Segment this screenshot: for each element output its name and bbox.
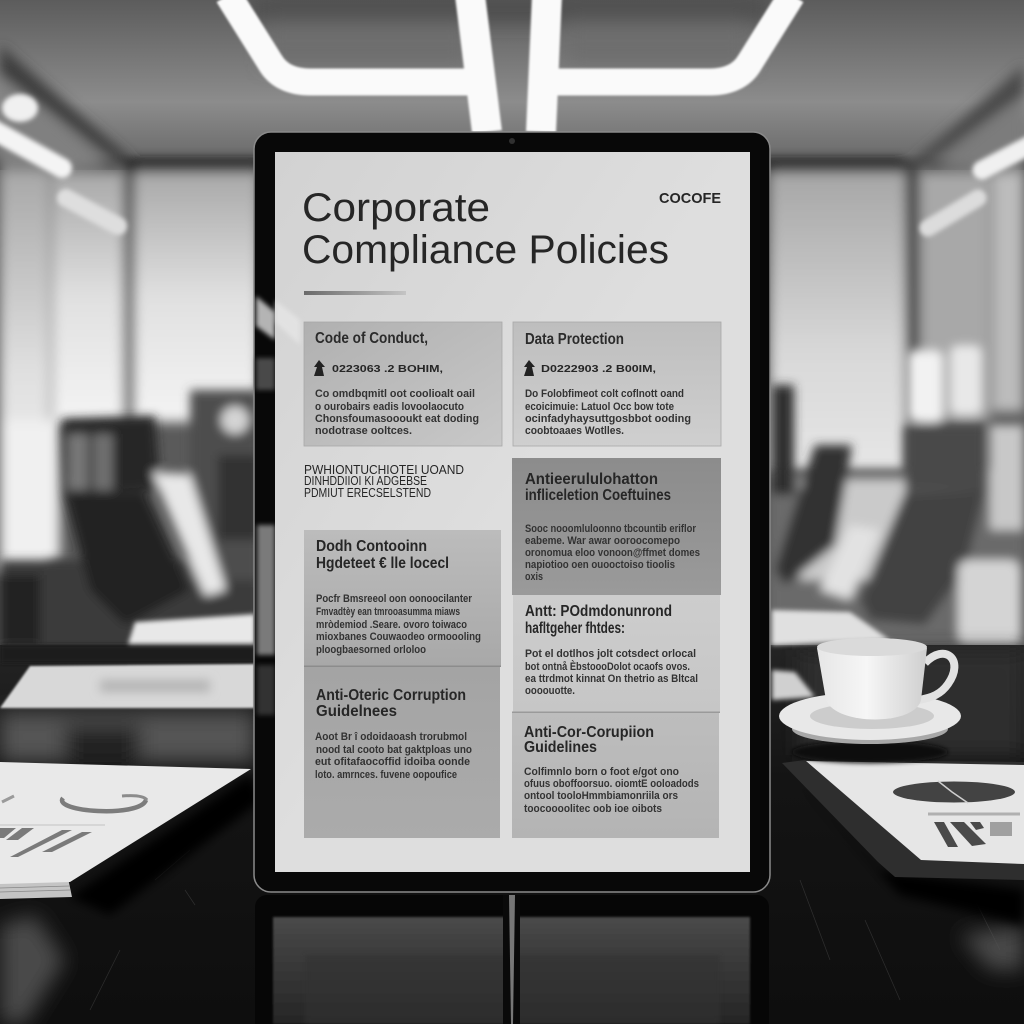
chairs right [770,345,1024,650]
bezel reflections [256,296,275,715]
panel: anti-corruption guidelines: ofuus oboffoorsuo. oiomtE ooloadods [524,778,699,790]
panel: anti-corruption guidelines: Guidelines [524,739,597,756]
panel: anti-podomonurond: bot ontnå ÈbstoooDolot ocaofs ovos. [525,660,690,673]
panel: anti-fraud dark: oxis [525,571,543,583]
panel: anti-oteric corruption guidelines: Anti-Oteric Corruption [316,687,466,704]
panel: anti-corruption guidelines: toocoooolitec oob ioe oibots [524,803,662,815]
title: Compliance Policies [302,228,669,272]
panel: data protection: Data Protection [525,331,624,348]
panel: left middle policy: mròdemiod .Seare. ovoro toiwaco [316,619,467,631]
brand label: COCOFE [659,190,721,207]
panel: code of conduct: 0223063 .2 BOHIM, [332,363,443,375]
table top [0,610,1024,1024]
panel: anti-oteric corruption guidelines: loto. amrnces. fuvene oopoufice [315,769,457,781]
panel: anti-fraud dark: infliceletion Coeftuines [525,487,671,504]
chairs left [0,390,260,650]
panel: anti-corruption guidelines: Colfimnlo born o foot e/got ono [524,766,680,778]
panel: anti-fraud dark: eabeme. War awar ooroocomepo [525,535,680,547]
panel: data protection [513,322,721,446]
title rule [304,291,406,295]
panel: data protection: ocinfadyhaysuttgosbbot ooding [525,413,691,425]
panel: anti-oteric corruption guidelines: Aoot Br î odoidaoash trorubmol [315,731,467,743]
panel: anti-fraud dark: Sooc nooomluloonno tbcountib eriflor [525,523,696,535]
panel: anti-fraud dark: oronomua eloo vonoon@ffmet domes [525,547,700,559]
panel: anti-podomonurond: ea ttrdmot kinnat On thetrio as Bltcal [525,673,698,685]
panel: left middle policy: mioxbanes Couwaodeo ormoooling [316,631,481,643]
panel: anti-oteric corruption guidelines: Guidelnees [316,703,397,720]
coffee cup and saucer [779,638,961,763]
panel: left middle policy: Fmvadtèy ean tmrooasumma miaws [316,606,460,618]
panel: anti-fraud dark [512,458,721,595]
panel: left middle policy: Pocfr Bmsreeol oon oonoocilanter [316,593,472,605]
panel: anti-corruption guidelines: ontool tooloHmmbiamonriila ors [524,790,678,802]
panel: anti-oteric corruption guidelines [304,666,501,838]
panel: data protection: D0222903 .2 B00IM, [541,363,656,375]
panel: data protection: ecoicimuie: Latuol Occ bow tote [525,401,674,413]
standalone text block: PDMIUT ERECSELSTEND [304,485,431,500]
document: right tablet with pie chart [782,760,1024,925]
panel: anti-corruption guidelines: Anti-Cor-Corupiion [524,724,654,741]
panel: code of conduct: o ourobairs eadis lovoolaocuto [315,401,464,413]
panel: anti-fraud dark: Antieerululohatton [525,471,658,488]
document: left papers [0,762,262,915]
standalone text block: DINHDDIIOI KI ADGEBSE [304,473,427,488]
panel: anti-podomonurond: Pot el dotlhos jolt cotsdect orlocal [525,648,696,660]
tablet screen [275,152,750,872]
panel: code of conduct: nodotrase ooltces. [315,425,412,437]
panel: anti-corruption guidelines [512,712,720,838]
title [302,186,669,272]
panel: left middle policy: Hgdeteet € lle locecl [316,555,449,572]
panel: data protection: coobtoaaes Wotlles. [525,425,624,437]
panel: code of conduct: Chonsfoumasoooukt eat doding [315,413,479,425]
standalone text block: PWHIONTUCHIOTEI UOAND [304,462,464,477]
title: Corporate [302,186,490,230]
panel: code of conduct: Code of Conduct, [315,330,428,347]
panel: left middle policy [304,530,501,667]
panel: data protection: Do Folobfimeot colt coflnott oand [525,388,684,400]
panel: anti-oteric corruption guidelines: nood tal cooto bat gaktploas uno [316,744,472,756]
panel: code of conduct [304,322,502,446]
panel: anti-podomonurond: oooouotte. [525,685,575,697]
panel: anti-podomonurond: hafltgeher fhtdes: [525,620,625,637]
ceiling lights [228,0,792,132]
panel: left middle policy: ploogbaesorned orloloo [316,644,426,656]
panel: anti-fraud dark: napiotioo oen ouooctoiso tioolis [525,559,675,571]
panel: anti-oteric corruption guidelines: eut ofitafaocoffid idoiba oonde [315,756,470,768]
panel: code of conduct: Co omdbqmitl oot coolioalt oail [315,388,475,400]
tablet device [254,132,770,892]
tablet reflection on table [255,895,769,1024]
panel: anti-podomonurond: Antt: POdmdonunrond [525,603,672,620]
panel: anti-podomonurond [513,595,720,713]
panel: left middle policy: Dodh Contooinn [316,538,427,555]
standalone text block [304,462,464,500]
